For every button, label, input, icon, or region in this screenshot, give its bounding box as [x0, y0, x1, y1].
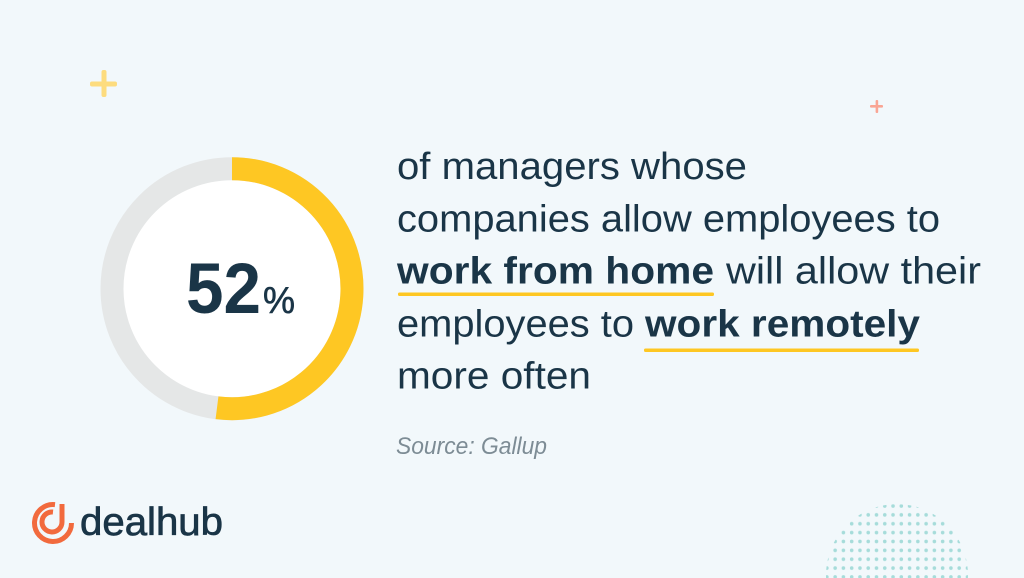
- highlight underlines: [398, 292, 919, 352]
- statement text: employees to: [397, 304, 634, 346]
- donut value label: 52: [186, 250, 261, 329]
- donut value label: %: [263, 280, 295, 321]
- logo wordmark: dealhub: [80, 501, 223, 544]
- statement text: work from home: [396, 250, 714, 292]
- logo: dealhub: [35, 501, 223, 544]
- donut chart: 52%: [112, 169, 352, 409]
- decorative dotted semicircle: [826, 504, 968, 578]
- icon: coral plus: [870, 100, 883, 113]
- statement text: will allow their: [725, 250, 981, 292]
- statement text: more often: [397, 356, 591, 398]
- icon: yellow plus: [90, 70, 117, 97]
- logo icon: [35, 504, 72, 541]
- statement text: companies allow employees to: [397, 198, 940, 240]
- donut value arc: [217, 169, 352, 409]
- statement text: work remotely: [644, 304, 920, 346]
- statement text: [396, 146, 981, 398]
- statement text: of managers whose: [397, 146, 747, 188]
- source note: Source: Gallup: [396, 433, 547, 460]
